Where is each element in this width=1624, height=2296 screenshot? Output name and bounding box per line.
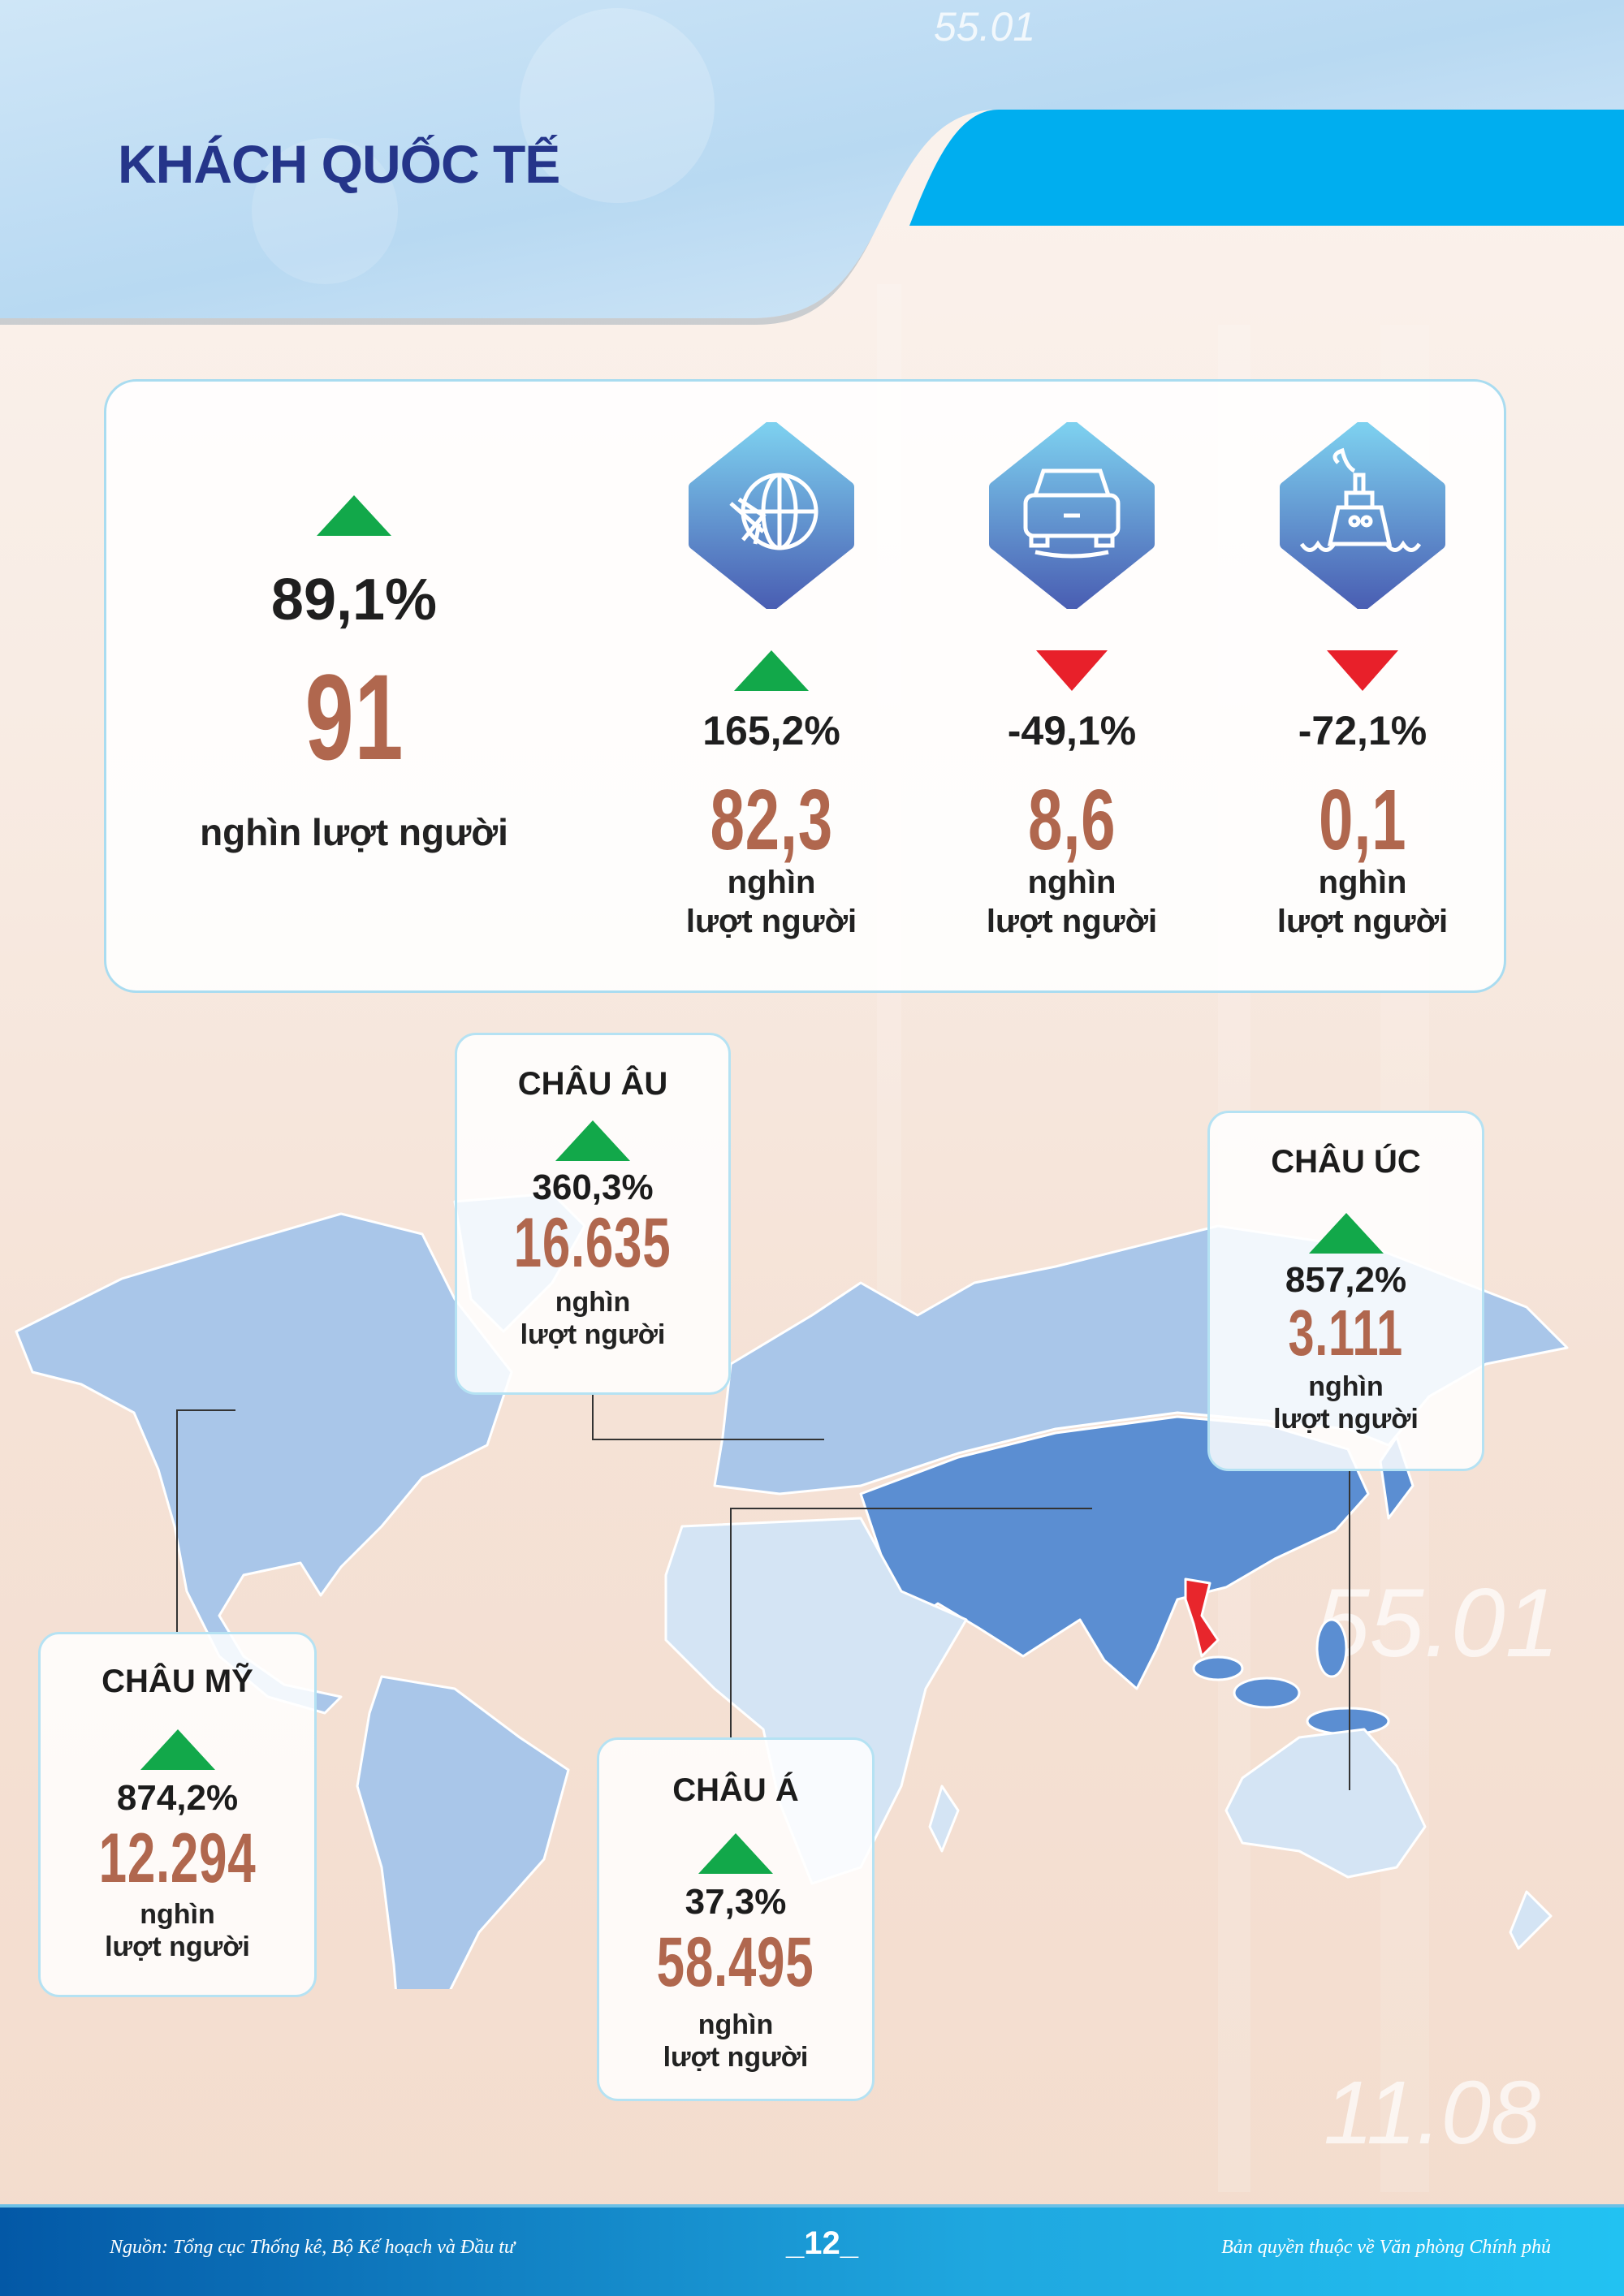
callout: Châu Mỹ: CHÂU MỸ bbox=[102, 1664, 253, 1699]
blue bar bbox=[909, 110, 1624, 226]
sea column bbox=[1277, 422, 1448, 939]
South America bbox=[357, 1677, 568, 2066]
total column: 91 bbox=[304, 649, 404, 785]
header bbox=[0, 0, 1624, 325]
total column: nghìn lượt người bbox=[200, 811, 508, 853]
road column: 8,6 bbox=[1028, 772, 1116, 868]
Europe & Russia bbox=[715, 1226, 1567, 1494]
footer bbox=[0, 2204, 1624, 2296]
footer: copyright: Bản quyền thuộc về Văn phòng Chính phủ bbox=[1221, 2237, 1551, 2258]
road column: -49,1% bbox=[1008, 708, 1136, 753]
total column bbox=[200, 495, 508, 853]
callout: Châu Á: CHÂU Á bbox=[672, 1772, 799, 1808]
Africa bbox=[666, 1518, 966, 1884]
callout: Châu Á: 37,3% bbox=[685, 1882, 786, 1922]
background decoration: 11.08 bbox=[1324, 2063, 1540, 2163]
background decoration: 55.01 bbox=[1315, 1569, 1559, 1677]
callout: Châu Mỹ: lượt người bbox=[105, 1931, 250, 1962]
callout: Châu Mỹ: 12.294 bbox=[99, 1819, 256, 1897]
air column: nghìn bbox=[728, 865, 815, 900]
Asia bbox=[861, 1417, 1368, 1689]
icon: ship bbox=[1280, 422, 1445, 609]
callout: Châu Âu: CHÂU ÂU bbox=[518, 1066, 667, 1102]
air column: 82,3 bbox=[710, 772, 833, 868]
air column: 165,2% bbox=[702, 708, 840, 753]
footer: page number: _12_ bbox=[786, 2225, 858, 2261]
callout: Châu Á: nghìn bbox=[698, 2009, 773, 2040]
callout: Châu Úc: 3.111 bbox=[1289, 1297, 1403, 1369]
Australia bbox=[1226, 1729, 1425, 1877]
callout: Châu Âu: lượt người bbox=[520, 1319, 665, 1350]
panel: totals by transport bbox=[104, 379, 1506, 993]
header: 55.01 bbox=[934, 4, 1035, 50]
callout: Châu Mỹ bbox=[38, 1632, 317, 1997]
road column: nghìn bbox=[1028, 865, 1116, 900]
sea column: 0,1 bbox=[1319, 772, 1406, 868]
icon: plane globe bbox=[689, 422, 854, 609]
callout: Châu Úc: CHÂU ÚC bbox=[1271, 1144, 1421, 1180]
callout: Châu Âu: 360,3% bbox=[532, 1167, 654, 1207]
callout: Châu Mỹ: nghìn bbox=[140, 1899, 215, 1930]
callout: Châu Âu: 16.635 bbox=[514, 1204, 672, 1282]
air column: lượt người bbox=[686, 904, 857, 939]
callout: Châu Úc: nghìn bbox=[1308, 1371, 1384, 1402]
callout: Châu Mỹ: 874,2% bbox=[117, 1778, 238, 1818]
callout: Châu Âu bbox=[455, 1033, 731, 1395]
total column: 89,1% bbox=[271, 568, 437, 632]
Vietnam bbox=[1186, 1579, 1218, 1656]
North America bbox=[16, 1214, 512, 1713]
icon: car bbox=[989, 422, 1155, 609]
air column bbox=[686, 422, 857, 939]
world map bbox=[15, 1195, 1569, 1989]
footer: source: Nguồn: Tổng cục Thống kê, Bộ Kế hoạch và Đầu tư bbox=[110, 2237, 515, 2258]
road column bbox=[987, 422, 1157, 939]
callout: Châu Á bbox=[597, 1737, 875, 2101]
callout: Châu Á: 58.495 bbox=[657, 1923, 814, 2001]
callout: Châu Úc: lượt người bbox=[1273, 1404, 1419, 1435]
title: KHÁCH QUỐC TẾ bbox=[118, 134, 559, 194]
callout: Châu Úc bbox=[1207, 1111, 1484, 1471]
sea column: nghìn bbox=[1319, 865, 1406, 900]
callout: Châu Âu: nghìn bbox=[555, 1287, 630, 1318]
callout: Châu Á: lượt người bbox=[663, 2042, 808, 2073]
sea column: lượt người bbox=[1277, 904, 1448, 939]
callout: Châu Úc: 857,2% bbox=[1285, 1260, 1406, 1300]
road column: lượt người bbox=[987, 904, 1157, 939]
sea column: -72,1% bbox=[1298, 708, 1427, 753]
